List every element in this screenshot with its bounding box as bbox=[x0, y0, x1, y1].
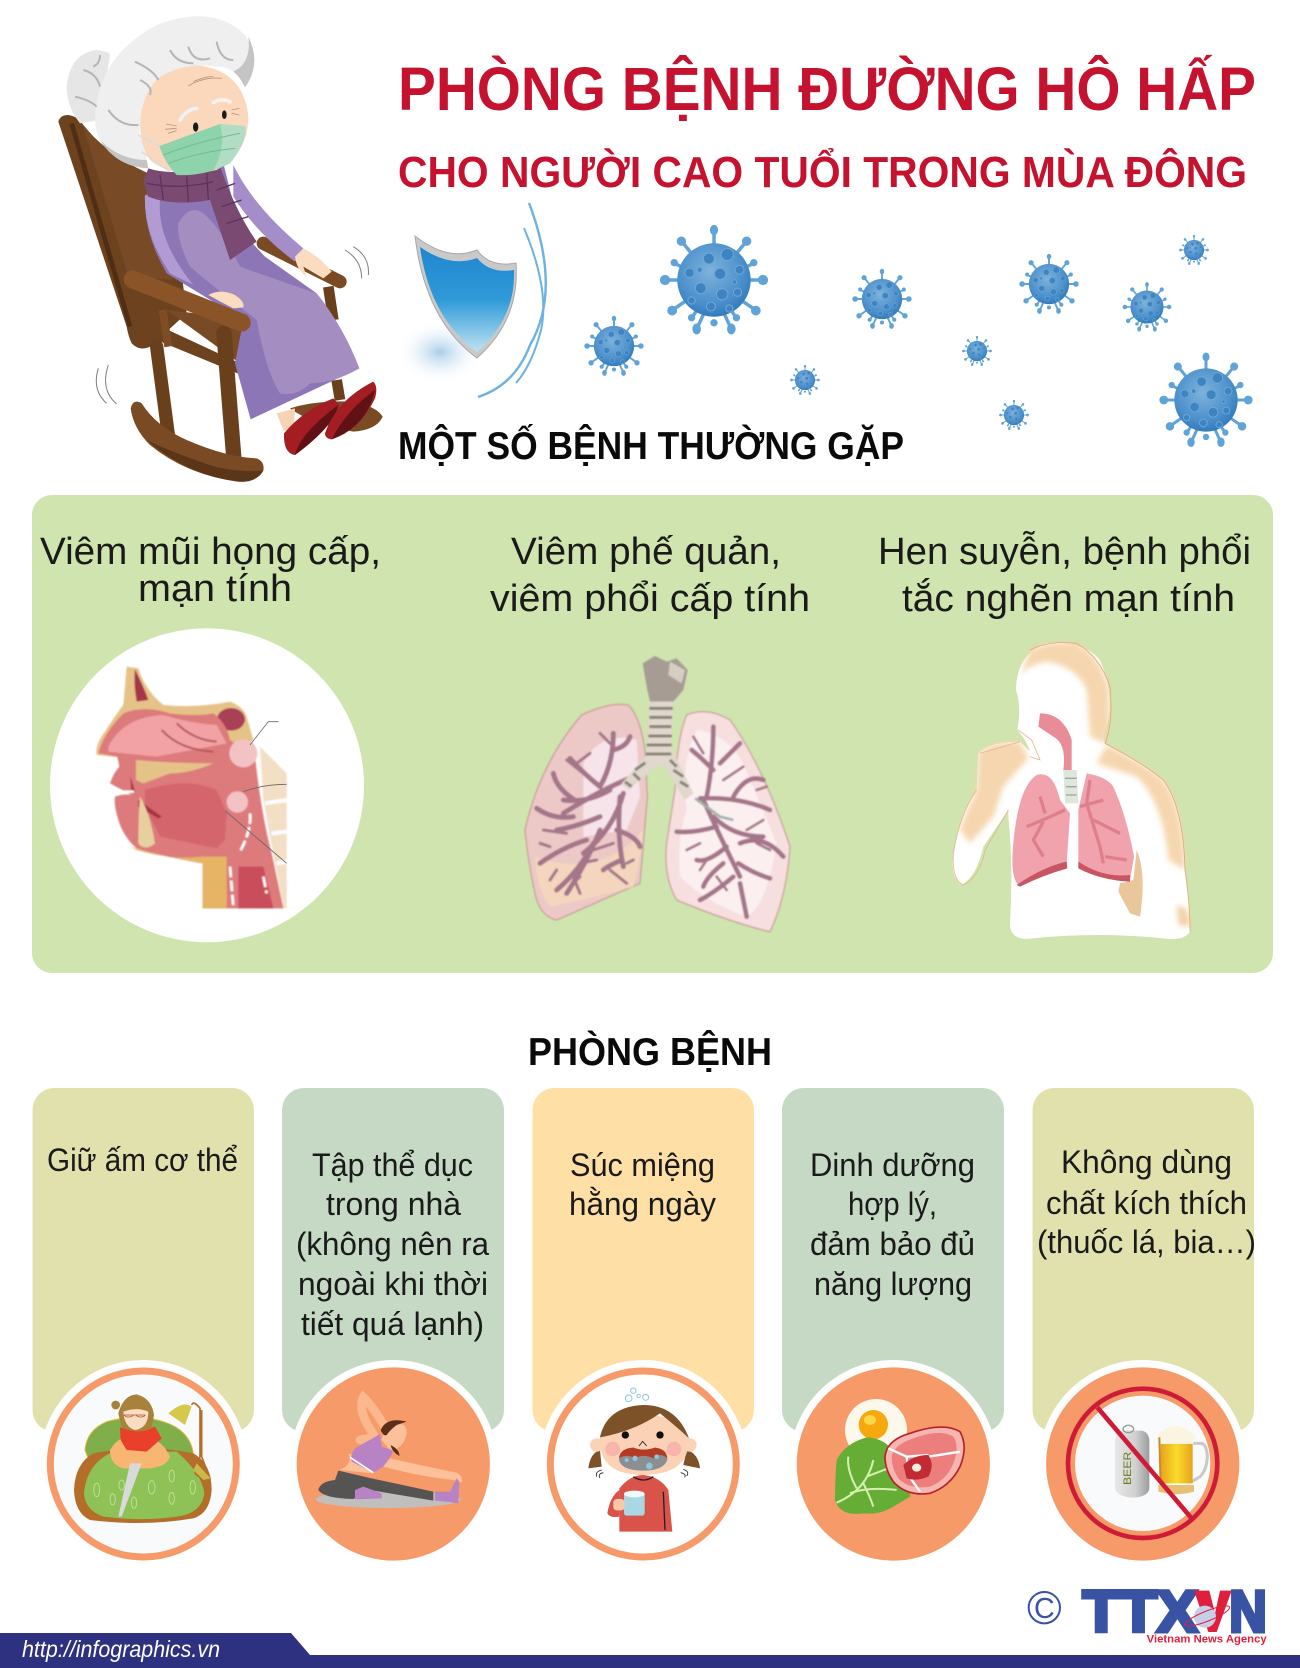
hair bbox=[95, 16, 254, 168]
footer bar: http://infographics.vn bbox=[22, 1636, 220, 1662]
icon: child gargling bbox=[588, 1388, 700, 1532]
title: PHÒNG BỆNH ĐƯỜNG HÔ HẤP bbox=[398, 55, 1256, 123]
face bbox=[140, 65, 248, 173]
card: mouth rinse bbox=[532, 1088, 754, 1568]
icon: egg, lettuce and meat bbox=[835, 1399, 964, 1514]
text: no stimulants: chất kích thích bbox=[1046, 1185, 1247, 1221]
copyright symbol: C bbox=[1034, 1593, 1055, 1625]
heading: prevention: PHÒNG BỆNH bbox=[528, 1030, 772, 1074]
logo: TTXVN bbox=[1029, 1581, 1268, 1646]
text: keep warm: Giữ ấm cơ thể bbox=[47, 1142, 238, 1178]
disease label 1 bbox=[40, 531, 381, 610]
logo: TTXVN: Vietnam News Agency bbox=[1147, 1634, 1268, 1646]
logo: TTXVN: N bbox=[1229, 1581, 1267, 1645]
text: nutrition: hợp lý, bbox=[848, 1186, 937, 1222]
disease label 2: viêm phổi cấp tính bbox=[490, 578, 810, 620]
text: no stimulants: Không dùng bbox=[1061, 1144, 1232, 1180]
illustration: coughing person bbox=[953, 642, 1190, 939]
icon: shield bbox=[396, 203, 546, 397]
disease label 3 bbox=[878, 530, 1251, 620]
face mask bbox=[159, 124, 246, 175]
text: exercise: tiết quá lạnh) bbox=[301, 1306, 484, 1342]
text: mouth rinse: Súc miệng bbox=[570, 1147, 715, 1183]
text: exercise: trong nhà bbox=[326, 1186, 461, 1222]
text: exercise: ngoài khi thời bbox=[298, 1266, 488, 1302]
text: nutrition: đảm bảo đủ bbox=[810, 1226, 975, 1262]
footer bar bbox=[0, 1633, 1300, 1668]
title bbox=[398, 55, 1256, 197]
icon: woman stretching bbox=[316, 1397, 462, 1508]
icon: prohibited beer: BEER bbox=[1122, 1452, 1134, 1485]
icon: woman wrapped in blanket bbox=[74, 1394, 212, 1523]
disease label 1: mạn tính bbox=[138, 568, 292, 610]
legs and slippers bbox=[277, 408, 295, 433]
copyright symbol bbox=[1029, 1592, 1060, 1625]
logo: TTXVN: TTX bbox=[1083, 1581, 1198, 1645]
hands bbox=[295, 248, 332, 278]
title: CHO NGƯỜI CAO TUỔI TRONG MÙA ĐÔNG bbox=[398, 146, 1247, 197]
scarf bbox=[143, 167, 257, 260]
text: no stimulants bbox=[1037, 1144, 1256, 1260]
disease label 1: Viêm mũi họng cấp, bbox=[40, 531, 381, 573]
text: exercise: Tập thể dục bbox=[312, 1147, 473, 1183]
text: nutrition: Dinh dưỡng bbox=[810, 1147, 975, 1183]
text: no stimulants: (thuốc lá, bia…) bbox=[1037, 1224, 1256, 1260]
disease label 2: Viêm phế quản, bbox=[511, 531, 781, 573]
illustration: elderly woman in rocking chair bbox=[58, 16, 383, 482]
illustration: lungs bbox=[525, 656, 790, 932]
illustration: nose and throat cross section bbox=[96, 667, 303, 908]
panel: common diseases bbox=[32, 495, 1273, 973]
back hair bun bbox=[67, 50, 110, 123]
card: nutrition bbox=[782, 1088, 1004, 1568]
viruses bbox=[584, 225, 1253, 447]
dress bbox=[145, 163, 359, 419]
rocking chair armrest bbox=[133, 279, 242, 323]
disease label 3: tắc nghẽn mạn tính bbox=[902, 577, 1235, 620]
disease label 2 bbox=[490, 531, 810, 620]
text: mouth rinse bbox=[569, 1147, 716, 1222]
card: keep warm bbox=[32, 1088, 254, 1568]
text: mouth rinse: hằng ngày bbox=[569, 1186, 716, 1222]
heading: common diseases: MỘT SỐ BỆNH THƯỜNG GẶP bbox=[398, 423, 904, 468]
disease label 3: Hen suyễn, bệnh phổi bbox=[878, 530, 1251, 573]
text: nutrition bbox=[810, 1147, 975, 1302]
text: exercise: (không nên ra bbox=[296, 1226, 489, 1262]
text: nutrition: năng lượng bbox=[814, 1266, 972, 1302]
text: exercise bbox=[296, 1147, 489, 1342]
card: exercise bbox=[282, 1088, 504, 1568]
motion lines bbox=[96, 247, 368, 404]
white circle behind nose and throat bbox=[50, 628, 364, 942]
card: no stimulants bbox=[1032, 1088, 1256, 1568]
icon: prohibited beer bbox=[1068, 1389, 1217, 1538]
